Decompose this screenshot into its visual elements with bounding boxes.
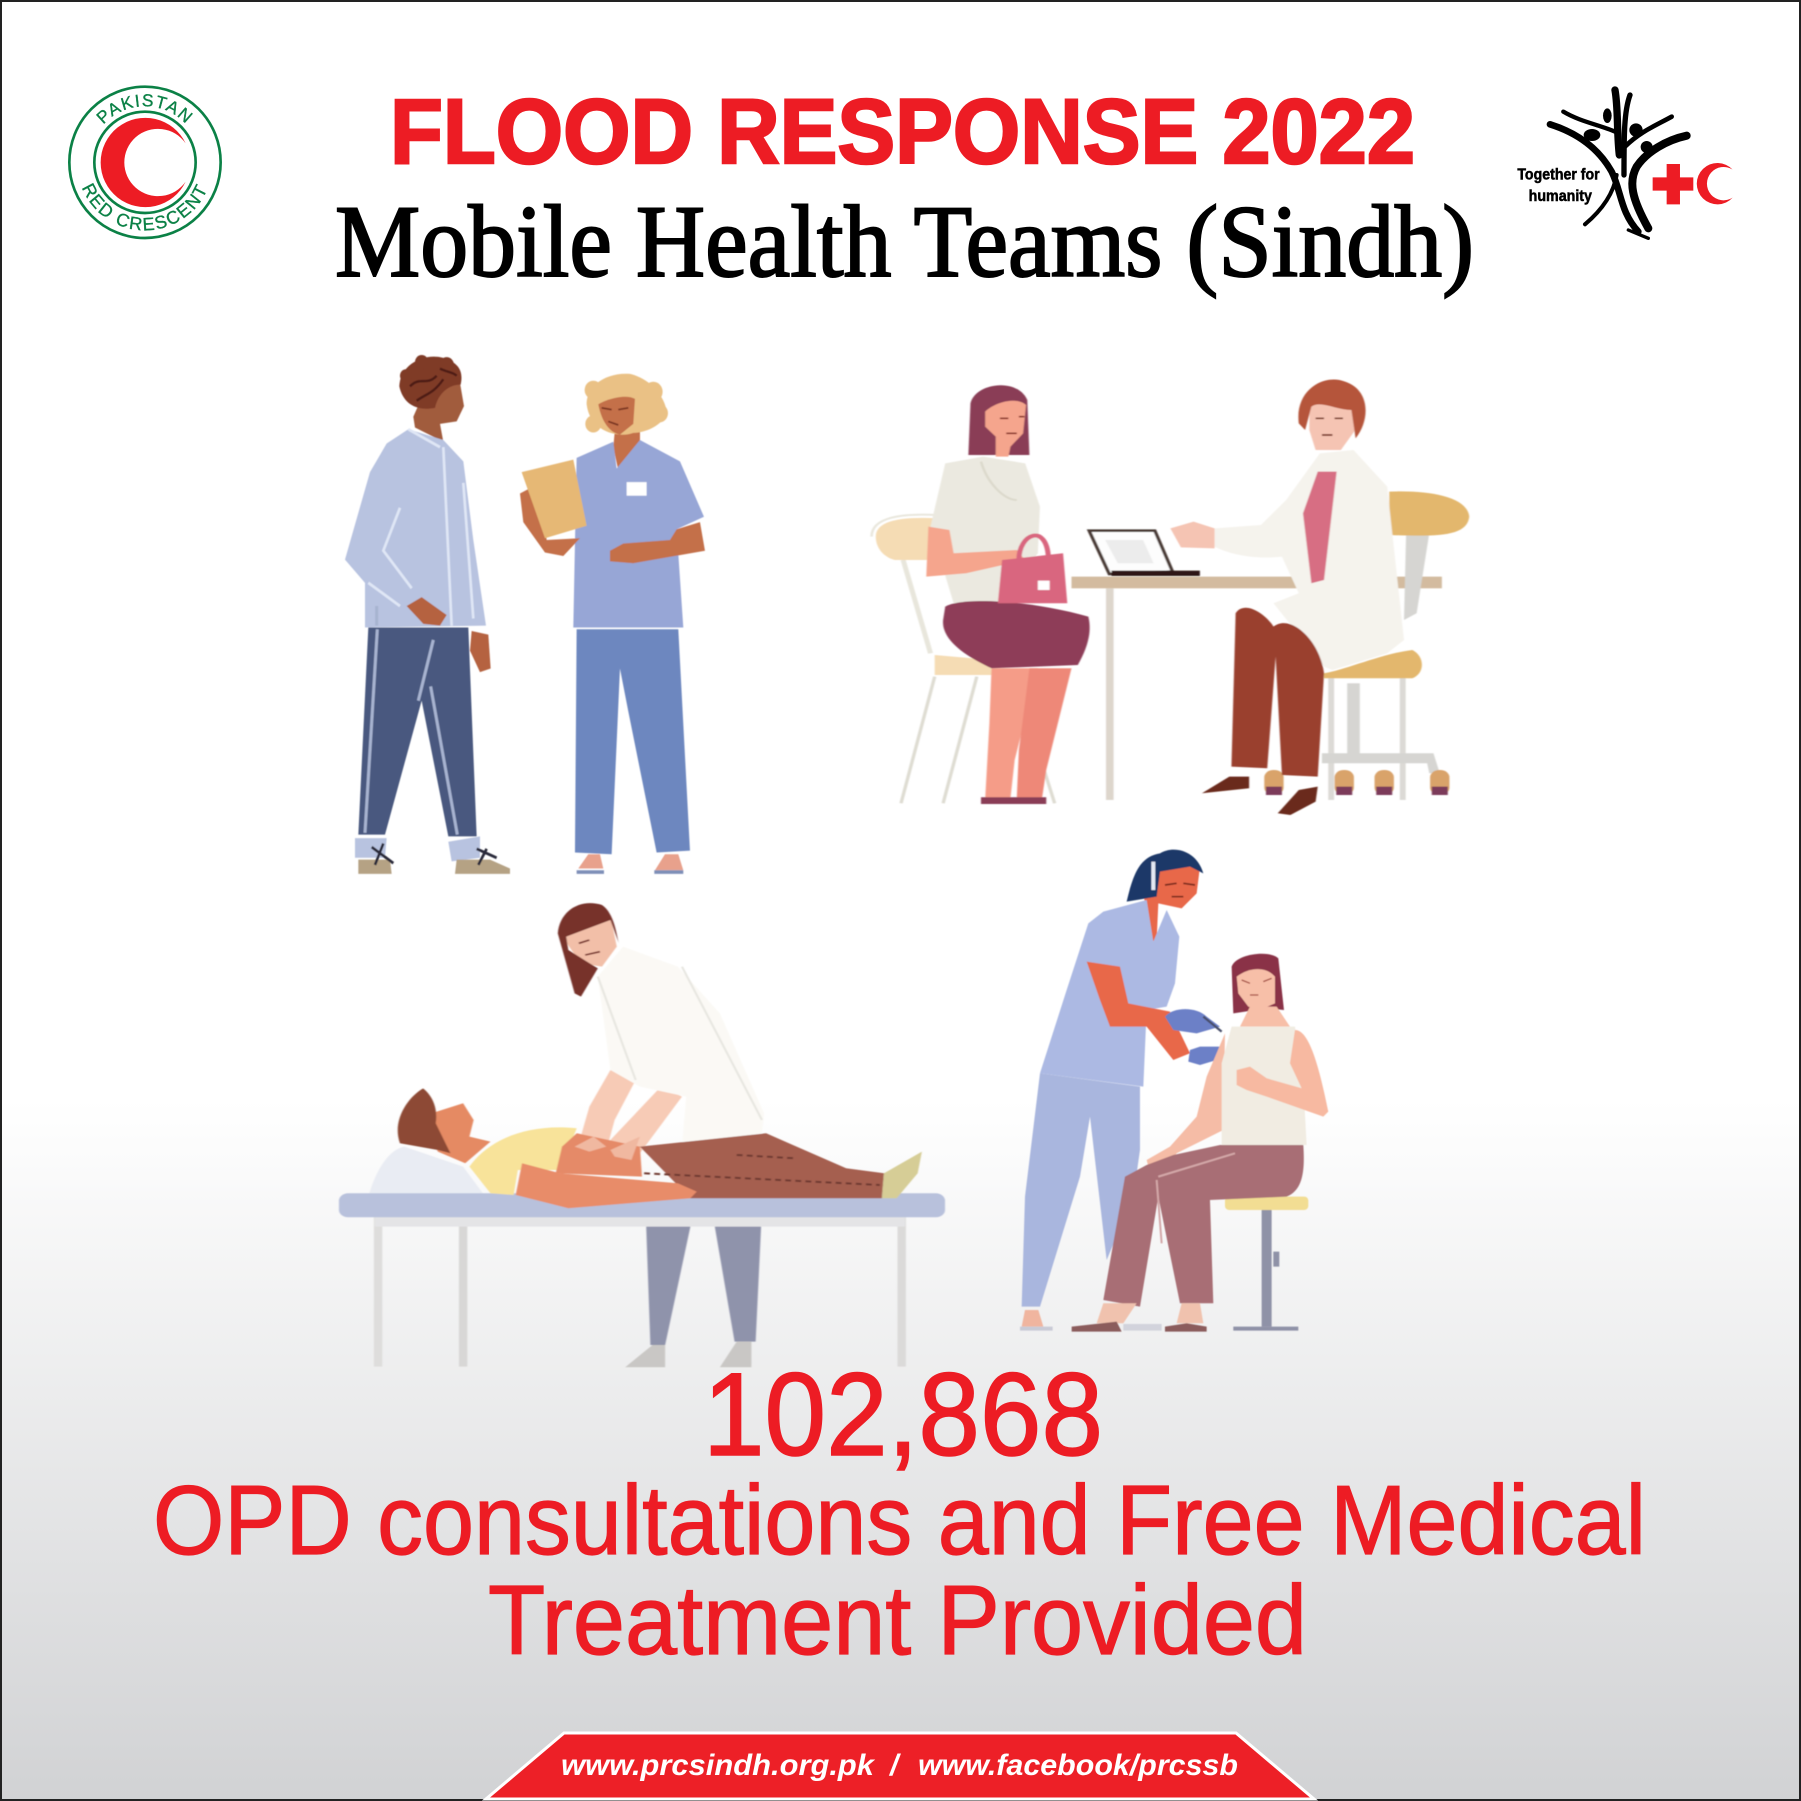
tagline: Together for bbox=[1517, 166, 1600, 183]
logo: Together for humanity bbox=[1517, 90, 1733, 238]
logo: Pakistan Red Crescent: PAKISTAN bbox=[96, 94, 193, 124]
footer banner bbox=[486, 1733, 1314, 1799]
illustration: nurse vaccinating seated woman bbox=[1020, 850, 1328, 1332]
statistic: 102,868: 102,868 bbox=[703, 1349, 1103, 1481]
title: Flood Response 2022: FLOOD RESPONSE 2022 bbox=[390, 81, 1415, 183]
lying patient bbox=[398, 1088, 922, 1208]
nurse bbox=[1020, 850, 1222, 1331]
caption line 1: OPD consultations and Free Medical bbox=[153, 1465, 1646, 1575]
nurse with clipboard bbox=[520, 374, 705, 874]
footer links: www.prcsindh.org.pk bbox=[561, 1749, 875, 1782]
red cross and crescent bbox=[1653, 164, 1693, 204]
dancing figures tree bbox=[1550, 90, 1687, 238]
footer links bbox=[561, 1749, 1238, 1782]
patient chair bbox=[872, 515, 1055, 803]
doctor bbox=[1170, 380, 1404, 815]
patient pillow and mattress bbox=[339, 1147, 945, 1217]
caption line 2: Treatment Provided bbox=[488, 1565, 1307, 1675]
man bbox=[345, 355, 510, 874]
logo: Together for humanity: humanity bbox=[1529, 188, 1592, 205]
illustration: two medical staff standing bbox=[345, 355, 705, 874]
stool bbox=[1225, 1197, 1308, 1331]
subtitle: Mobile Health Teams: Mobile Health Teams (Sindh) bbox=[335, 185, 1474, 299]
footer links: / bbox=[888, 1749, 901, 1782]
bed frame bbox=[364, 1217, 932, 1370]
desk with laptop bbox=[1071, 531, 1442, 800]
doctor stool bbox=[1264, 491, 1469, 800]
illustration: doctor examining patient on bed bbox=[339, 903, 945, 1370]
illustration: doctor consultation at desk bbox=[872, 380, 1469, 815]
footer links: www.facebook/prcssb bbox=[918, 1749, 1238, 1782]
seated woman bbox=[926, 385, 1090, 804]
statistic caption bbox=[153, 1465, 1646, 1675]
logo: Pakistan Red Crescent bbox=[68, 85, 222, 240]
logo: Pakistan Red Crescent: RED CRESCENT bbox=[82, 182, 206, 231]
examining doctor bbox=[558, 903, 764, 1367]
seated patient bbox=[1072, 954, 1328, 1332]
